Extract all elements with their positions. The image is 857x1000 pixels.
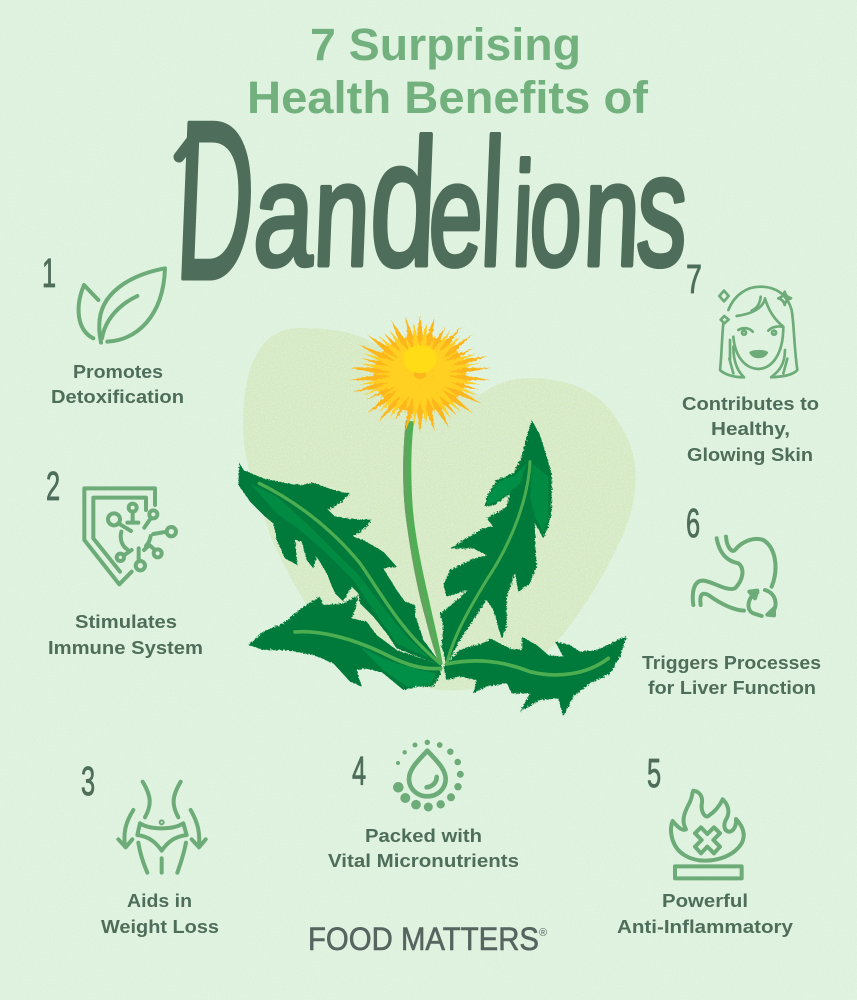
benefit 5: powerful anti-inflammatory <box>617 751 794 937</box>
illustration: dandelion plant <box>238 315 627 717</box>
logo: Food Matters: ® <box>539 927 547 939</box>
flower head <box>349 315 491 433</box>
label: Healthy, <box>711 418 790 439</box>
title: 7 Surprising Health Benefits of: Health Benefits of <box>247 72 649 123</box>
label: Anti-Inflammatory <box>617 916 794 937</box>
number 4: 4 <box>352 749 366 795</box>
number 2: 2 <box>46 464 60 510</box>
leaf: lower left <box>248 595 442 690</box>
title: Dandelions: i <box>510 133 536 297</box>
leaf: upper left <box>238 462 442 665</box>
number 7: 7 <box>686 257 702 302</box>
label: for Liver Function <box>648 677 816 698</box>
title: Dandelions: n <box>311 133 373 297</box>
icon: flame with cross <box>671 791 744 878</box>
label: Aids in <box>127 890 192 911</box>
title: Dandelions: d <box>367 103 441 304</box>
label: Weight Loss <box>101 916 219 937</box>
icon: woman's face with sparkles <box>719 287 797 377</box>
benefit 7: contributes to healthy, glowing skin <box>682 257 819 465</box>
title: 7 Surprising Health Benefits of <box>247 19 649 123</box>
label: Vital Micronutrients <box>328 850 519 871</box>
leaf midribs <box>259 462 608 675</box>
label: Triggers Processes <box>642 652 821 673</box>
title: Dandelions: o <box>527 133 585 297</box>
benefit 4: packed with vital micronutrients <box>328 740 519 871</box>
label: Glowing Skin <box>687 444 813 465</box>
benefit 3: aids in weight loss <box>81 759 219 937</box>
leaf: upper right <box>440 420 552 665</box>
title: Dandelions: s <box>634 120 691 299</box>
title: 7 Surprising Health Benefits of: 7 Surprising <box>310 19 581 70</box>
label: Promotes <box>73 361 163 382</box>
icon: waist with arrows <box>118 782 206 873</box>
title: Dandelions: D <box>172 74 260 326</box>
icon: stomach with cycle arrows <box>693 537 776 616</box>
leaf: lower right <box>443 636 627 717</box>
icon: shield with virus <box>84 488 176 584</box>
icon: droplet with dots <box>393 740 464 812</box>
benefit 2: stimulates immune system <box>46 464 203 658</box>
number 3: 3 <box>81 759 95 805</box>
logo: Food Matters: FOOD MATTERS <box>308 921 539 957</box>
title: Dandelions: l <box>478 103 508 304</box>
title: Dandelions: n <box>581 133 643 297</box>
background blob <box>243 328 636 690</box>
icon: leaf <box>79 268 165 343</box>
benefit 6: triggers processes for liver function <box>642 501 821 698</box>
label: Detoxification <box>51 386 184 407</box>
label: Powerful <box>662 890 748 911</box>
title: Dandelions: e <box>426 133 486 297</box>
label: Contributes to <box>682 393 819 414</box>
label: Stimulates <box>75 611 177 632</box>
number 1: 1 <box>42 251 56 297</box>
leaves <box>238 420 627 717</box>
number 6: 6 <box>686 501 700 547</box>
number 5: 5 <box>647 751 661 797</box>
stem <box>403 420 443 666</box>
title: Dandelions: a <box>251 133 318 297</box>
label: Packed with <box>365 825 482 846</box>
benefit 1: promotes detoxification <box>42 251 184 407</box>
label: Immune System <box>48 637 203 658</box>
